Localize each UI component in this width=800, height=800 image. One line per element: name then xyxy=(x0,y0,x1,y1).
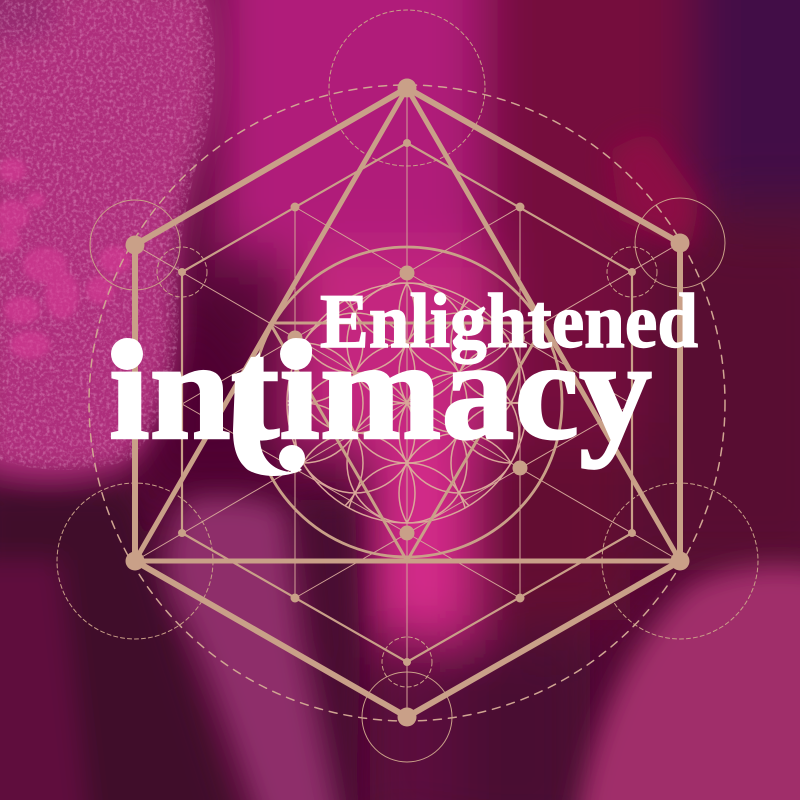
thin lattice lines xyxy=(135,88,680,717)
title line: intimacy: intimacy xyxy=(109,311,652,469)
outer hexagon xyxy=(135,88,680,717)
flower of life xyxy=(288,284,520,522)
inner hexagon xyxy=(182,143,632,662)
title line: Enlightened: Enlightened xyxy=(320,278,698,364)
outer dashed circle xyxy=(89,85,725,721)
vertex dots xyxy=(126,78,690,726)
title accents: dots, t stem and swash xyxy=(111,338,312,476)
upward triangle xyxy=(135,88,680,561)
flower boundary circle xyxy=(287,283,527,523)
title xyxy=(109,278,698,476)
downward triangle xyxy=(270,323,545,561)
large inner circle xyxy=(252,247,562,557)
